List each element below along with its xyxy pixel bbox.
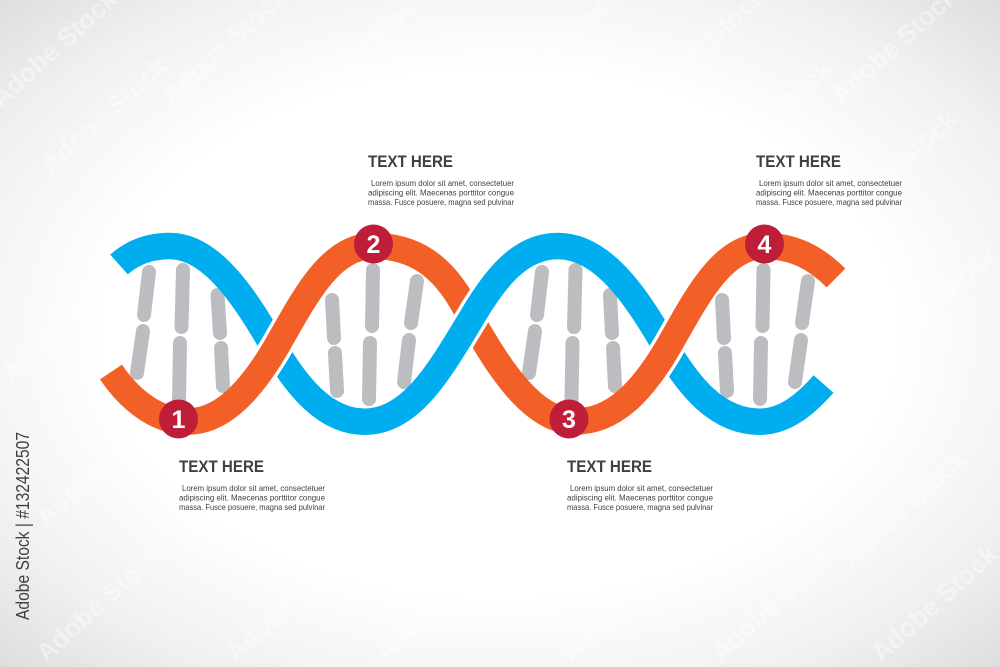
text: Adobe Stock	[382, 44, 520, 173]
text block 3	[567, 458, 713, 512]
chart: DNA double helix	[111, 224, 836, 438]
body 4	[756, 178, 902, 207]
body 2: Lorem ipsum dolor sit amet, consectetuer	[371, 178, 514, 188]
body 4: adipiscing elit. Maecenas porttitor congue	[756, 188, 902, 198]
text block 2	[368, 153, 514, 207]
marker 3	[550, 400, 588, 438]
text: Adobe Stock	[160, 94, 298, 223]
body 1: massa. Fusce posuere, magna sed pulvinar	[179, 502, 325, 512]
body 1: adipiscing elit. Maecenas porttitor congue	[179, 492, 325, 502]
text block 4	[756, 153, 902, 207]
orange strand	[111, 246, 836, 422]
text: Adobe Stock	[705, 539, 843, 667]
body 2: massa. Fusce posuere, magna sed pulvinar	[368, 197, 514, 207]
marker 3: 3	[562, 406, 576, 434]
base pairs: grey rungs	[137, 270, 808, 400]
marker 2: 2	[367, 231, 380, 259]
blue strand	[119, 246, 824, 422]
marker 1	[159, 400, 198, 438]
body 1	[179, 483, 325, 512]
marker 4	[745, 224, 784, 264]
body 4: massa. Fusce posuere, magna sed pulvinar	[756, 197, 902, 207]
text: Adobe Stock	[555, 539, 693, 667]
marker 2	[354, 224, 393, 264]
body 2	[368, 178, 514, 207]
text: Adobe Stock	[220, 539, 358, 667]
text: Adobe Stock	[35, 51, 173, 180]
text: Adobe Stock	[375, 409, 513, 538]
text: Adobe Stock	[700, 54, 838, 183]
heading 1: TEXT HERE	[179, 458, 264, 476]
blue strand crossing over orange	[434, 275, 508, 362]
text: Adobe Stock	[370, 539, 508, 667]
text: Adobe Stock	[495, 89, 633, 218]
marker 1: 1	[172, 406, 186, 434]
body 4: Lorem ipsum dolor sit amet, consectetuer	[759, 178, 902, 188]
body 1: Lorem ipsum dolor sit amet, consectetuer	[182, 483, 325, 493]
body 2: adipiscing elit. Maecenas porttitor congue	[368, 188, 514, 198]
text: Adobe Stock	[170, 429, 308, 558]
marker 4: 4	[758, 231, 772, 259]
heading 3: TEXT HERE	[567, 458, 652, 476]
text: Adobe Stock	[835, 444, 973, 573]
heading 4: TEXT HERE	[756, 153, 841, 171]
text: Adobe Stock	[30, 404, 168, 533]
text: Adobe Stock	[865, 539, 1000, 667]
text: Adobe Stock	[30, 539, 168, 667]
heading 2: TEXT HERE	[368, 153, 453, 171]
text: Adobe Stock	[710, 414, 848, 543]
body 3: adipiscing elit. Maecenas porttitor congue	[567, 492, 713, 502]
body 3: Lorem ipsum dolor sit amet, consectetuer	[570, 483, 713, 493]
body 3	[567, 483, 713, 512]
text: Adobe Stock	[865, 239, 1000, 368]
text: Adobe Stock	[500, 449, 638, 578]
text block 1	[179, 458, 325, 512]
body 3: massa. Fusce posuere, magna sed pulvinar	[567, 502, 713, 512]
text: Adobe Stock	[825, 104, 963, 233]
stock id label: Adobe Stock | #132422507	[13, 432, 33, 620]
